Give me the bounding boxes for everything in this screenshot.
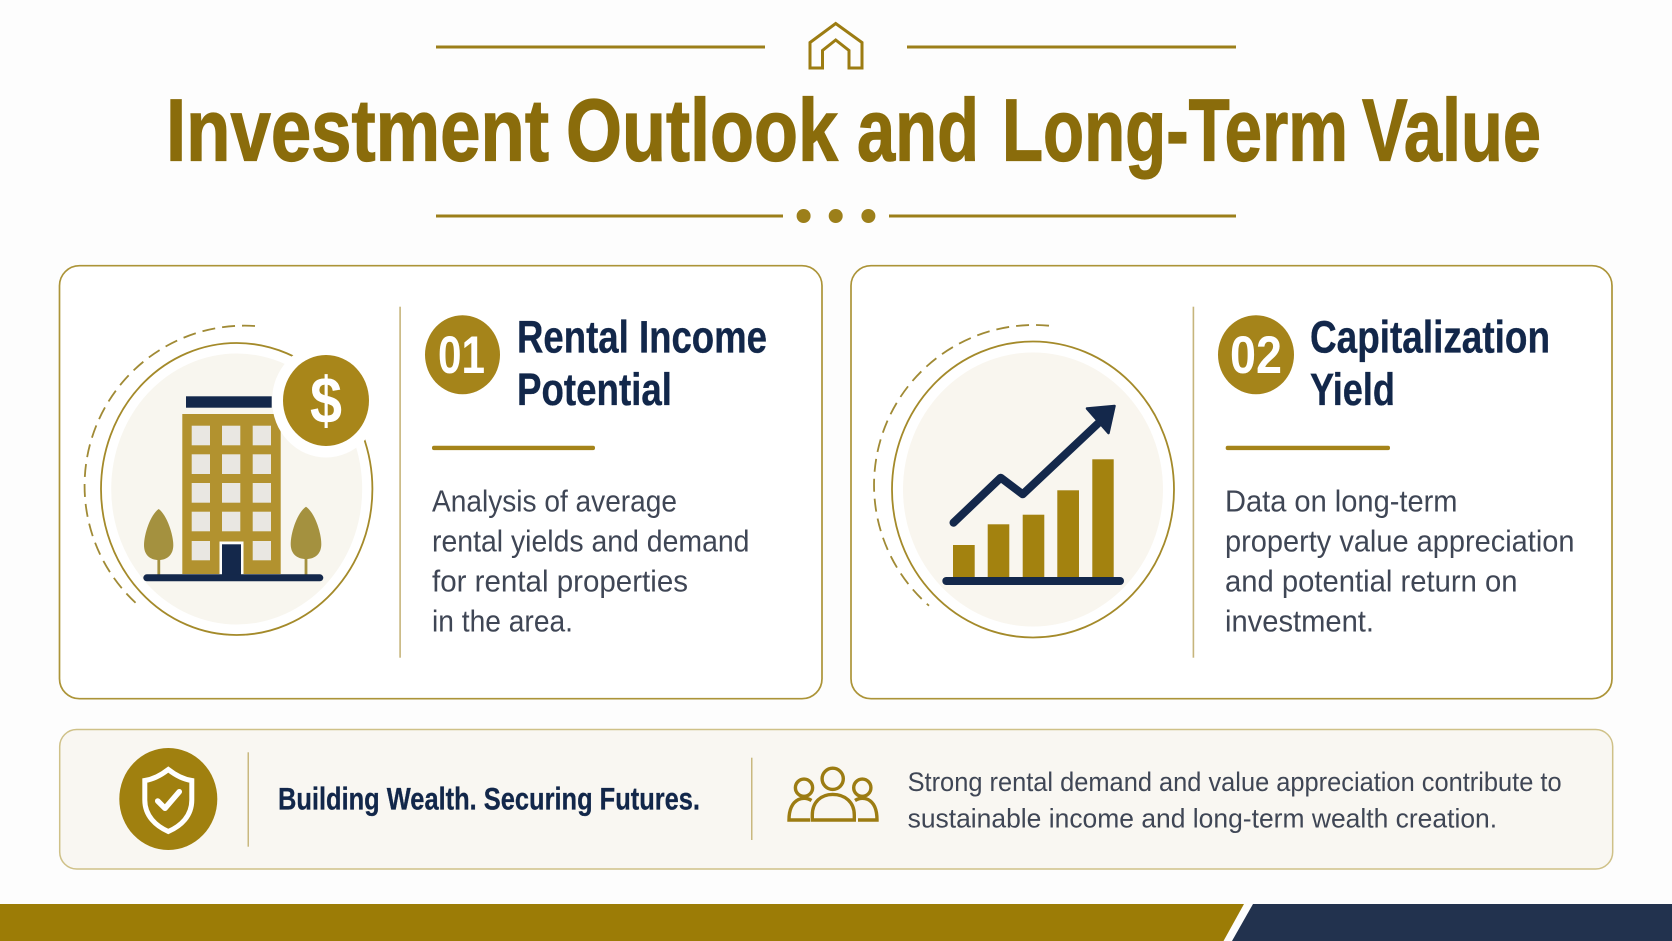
trees <box>144 507 321 575</box>
title: Outlook <box>566 80 839 180</box>
badge 01 <box>425 315 500 394</box>
tagline: Building Wealth. Securing Futures. <box>278 780 700 816</box>
footer bar <box>0 904 1672 941</box>
body text: for rental properties <box>432 566 688 599</box>
icon: bar chart with rising arrow <box>874 325 1174 638</box>
heading: Potential <box>517 364 672 415</box>
body text: in the area. <box>432 606 573 639</box>
heading: Rental Income <box>517 312 767 362</box>
heading: Yield <box>1310 364 1395 415</box>
title: and <box>857 80 979 180</box>
body text: rental yields and demand <box>432 526 750 559</box>
body text <box>1225 486 1574 639</box>
body text: investment. <box>1225 606 1374 639</box>
bars <box>953 459 1114 578</box>
badge 02 <box>1218 315 1294 394</box>
body text: and potential return on <box>1225 566 1518 599</box>
summary text: sustainable income and long-term wealth creation. <box>908 803 1497 833</box>
header ornament: lines and house icon <box>436 24 1236 68</box>
dollar coin: $ <box>310 363 342 437</box>
ground line <box>143 574 323 581</box>
title: Value <box>1362 80 1541 180</box>
body text <box>432 486 750 639</box>
arrow <box>954 406 1114 523</box>
building <box>182 396 281 575</box>
summary text <box>908 767 1562 833</box>
heading: Capitalization <box>1310 312 1550 362</box>
dollar coin <box>272 344 380 458</box>
badge 02: 02 <box>1230 326 1282 385</box>
icon: building with dollar coin <box>85 326 380 635</box>
icon: house outline <box>810 24 862 68</box>
icon: group of people <box>789 768 877 820</box>
panel: rental income potential <box>60 266 822 699</box>
header ornament: divider with three dots <box>436 209 1236 223</box>
summary text: Strong rental demand and value appreciation contribute to <box>908 767 1562 797</box>
body text: property value appreciation <box>1225 526 1574 559</box>
icon: shield with check <box>119 748 217 850</box>
badge 01: 01 <box>438 326 485 385</box>
title: Long-Term <box>1002 80 1348 180</box>
panel: summary band <box>60 730 1613 869</box>
panel: capitalization yield <box>851 266 1612 699</box>
body text: Analysis of average <box>432 486 677 519</box>
title: Investment <box>166 80 549 180</box>
body text: Data on long-term <box>1225 486 1458 519</box>
